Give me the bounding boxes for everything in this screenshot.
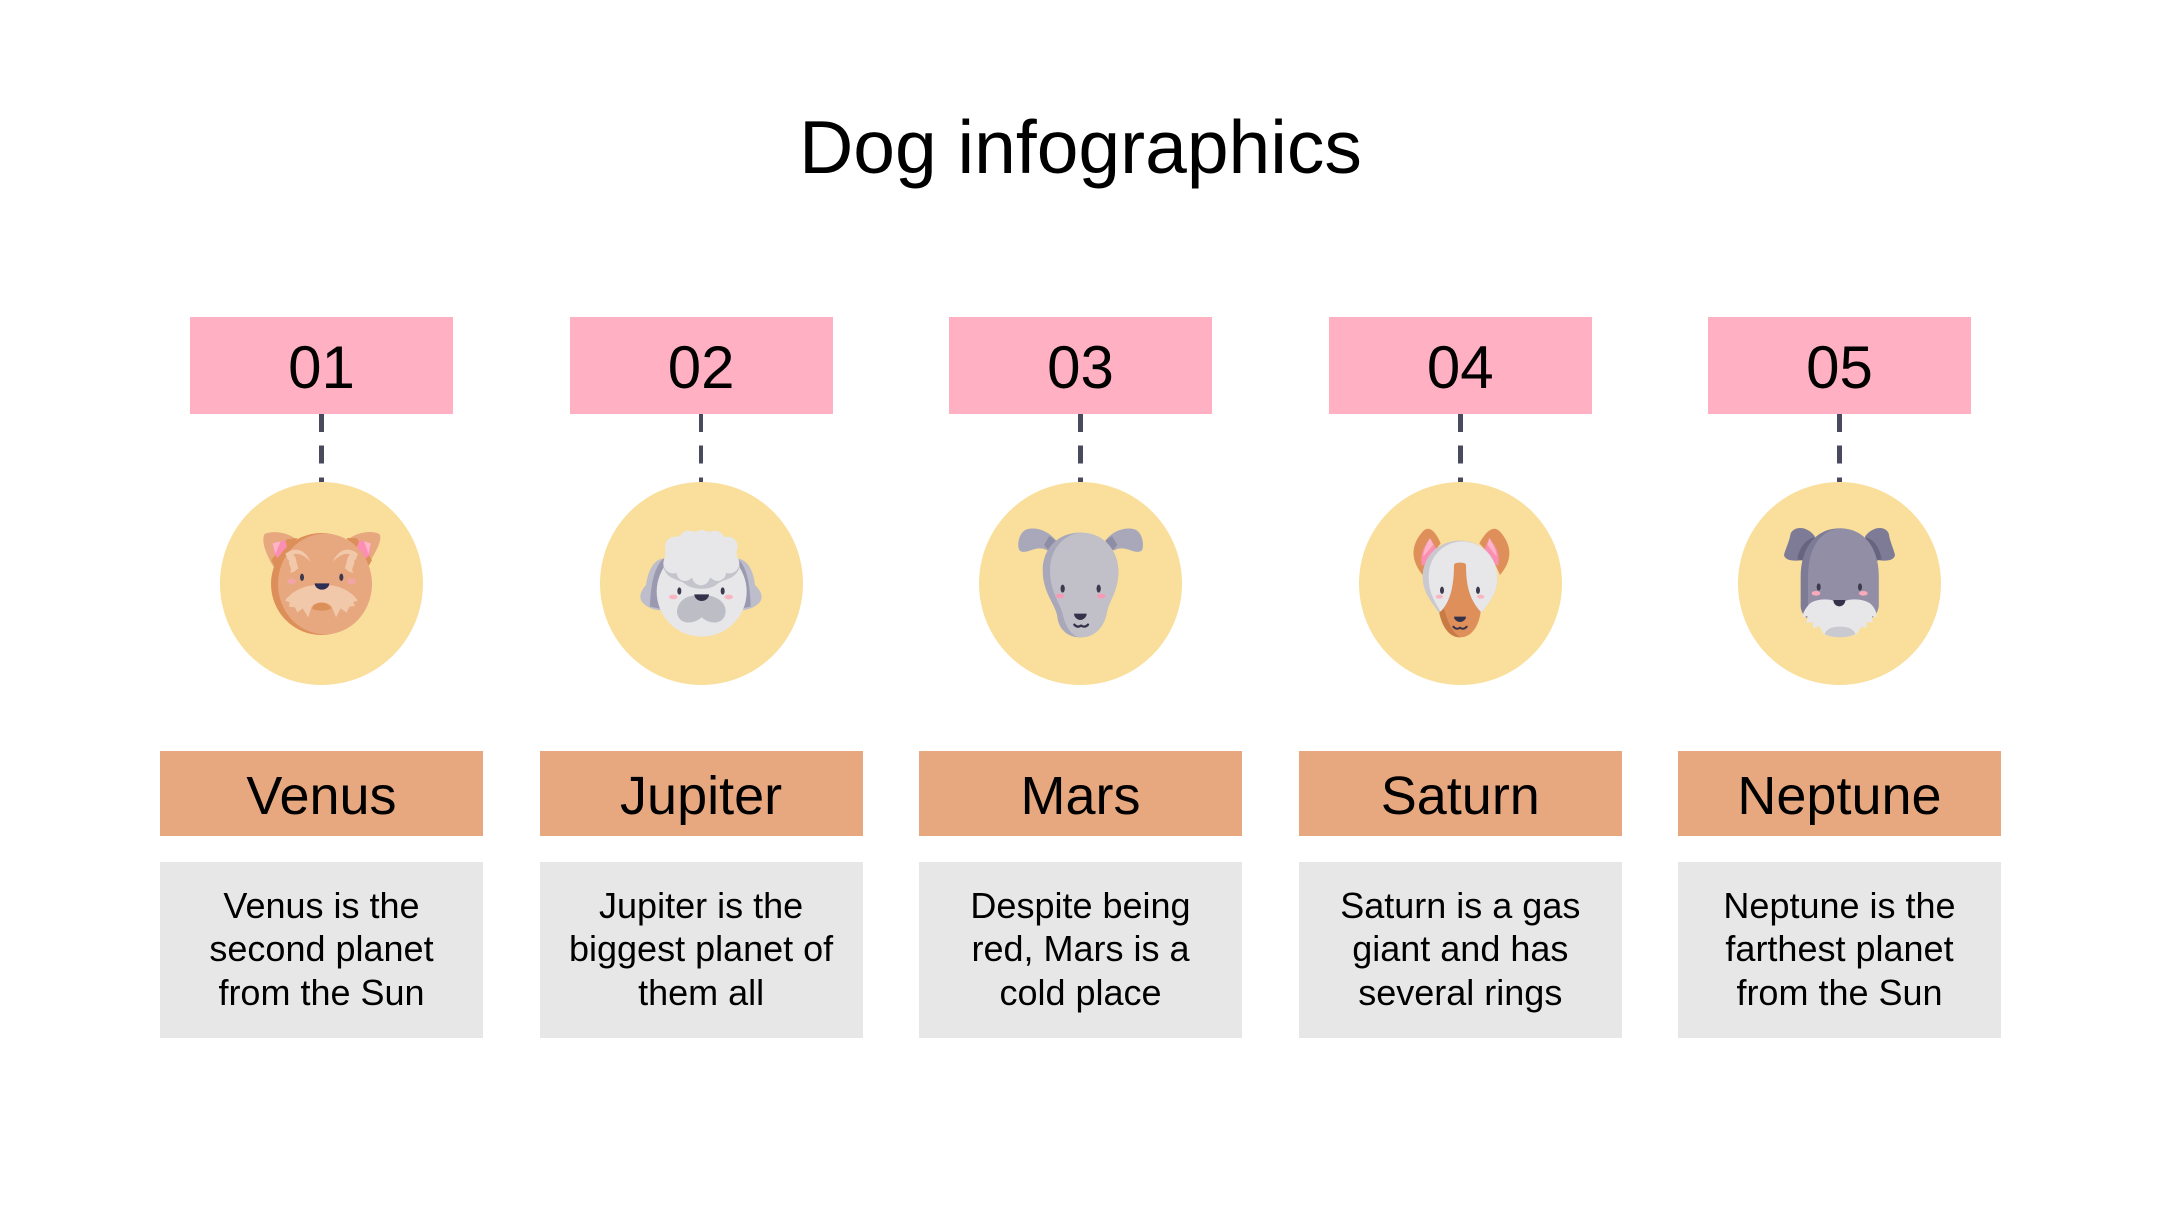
panel: column 05 Neptune	[1678, 317, 2001, 1038]
dashed connector 01	[319, 414, 324, 482]
description: Neptune: from the Sun	[1736, 972, 1943, 1013]
dashed connector 04	[1458, 414, 1463, 482]
icon: orange terrier dog	[263, 532, 380, 635]
number badge 01: 01	[288, 334, 355, 401]
number badge 04: 04	[1427, 334, 1494, 401]
name bar: Saturn	[1299, 751, 1622, 836]
description: Saturn: giant and has	[1352, 928, 1568, 969]
panel: column 01 Venus	[160, 317, 483, 1038]
description: Mars: Despite being	[970, 885, 1191, 926]
name bar: Jupiter	[540, 751, 863, 836]
number badge 02: 02	[668, 334, 734, 401]
circle background 04	[1359, 482, 1562, 685]
name bar: Saturn: Saturn	[1381, 766, 1540, 826]
number badge 05	[1708, 317, 1971, 414]
description: Jupiter: Jupiter is the	[599, 885, 803, 926]
name bar: Neptune	[1678, 751, 2001, 836]
number badge 05: 05	[1806, 334, 1873, 401]
number badge 02	[570, 317, 833, 414]
description: Jupiter: biggest planet of	[569, 928, 833, 969]
description: Venus: from the Sun	[218, 972, 425, 1013]
icon: white and orange pointed-ear dog	[1414, 528, 1510, 638]
number badge 04	[1329, 317, 1592, 414]
circle background 02	[600, 482, 803, 685]
description: Mars	[919, 862, 1242, 1038]
name bar: Neptune: Neptune	[1737, 766, 1942, 826]
panel: column 04 Saturn	[1299, 317, 1622, 1038]
name bar: Jupiter: Jupiter	[620, 766, 782, 826]
description: Jupiter: them all	[638, 972, 764, 1013]
name bar: Mars	[919, 751, 1242, 836]
number badge 03	[949, 317, 1212, 414]
number badge 03: 03	[1047, 334, 1114, 401]
name bar: Venus	[160, 751, 483, 836]
description: Jupiter	[540, 862, 863, 1038]
description: Venus: second planet	[209, 928, 434, 969]
description: Venus: Venus is the	[223, 885, 420, 926]
dashed connector 03	[1078, 414, 1083, 482]
description: Saturn	[1299, 862, 1622, 1038]
icon: grey floppy-ear dog	[1018, 528, 1143, 638]
dashed connector 05	[1837, 414, 1842, 482]
circle background 03	[979, 482, 1182, 685]
number badge 01	[190, 317, 453, 414]
panel: column 03 Mars	[919, 317, 1242, 1038]
description: Venus	[160, 862, 483, 1038]
description: Neptune: Neptune is the	[1723, 885, 1956, 926]
description: Saturn: several rings	[1358, 972, 1562, 1013]
title: Dog infographics	[799, 104, 1362, 188]
name bar: Mars: Mars	[1020, 766, 1140, 826]
description: Mars: cold place	[999, 972, 1162, 1013]
description: Saturn: Saturn is a gas	[1340, 885, 1580, 926]
circle background 05	[1738, 482, 1941, 685]
icon: grey schnauzer dog	[1784, 528, 1895, 638]
dashed connector 02	[699, 414, 703, 482]
name bar: Venus: Venus	[246, 766, 397, 826]
icon: white poodle dog	[640, 530, 762, 637]
description: Neptune: farthest planet	[1725, 928, 1954, 969]
description: Neptune	[1678, 862, 2001, 1038]
panel: column 02 Jupiter	[540, 317, 863, 1038]
description: Mars: red, Mars is a	[971, 928, 1190, 969]
circle background 01	[220, 482, 423, 685]
